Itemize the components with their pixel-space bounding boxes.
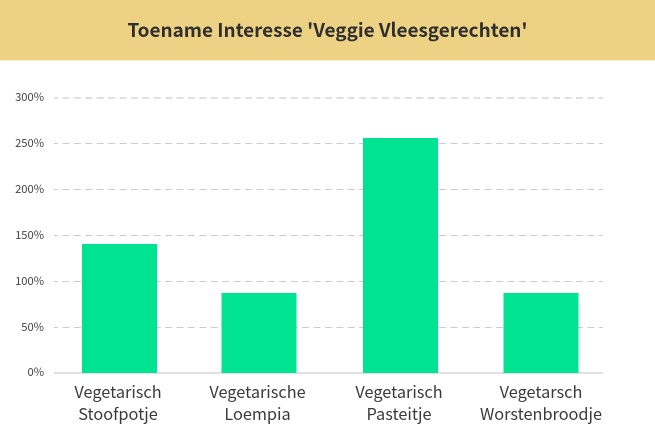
y axis labels [15, 89, 44, 380]
category labels: Pasteitje [367, 401, 431, 425]
category labels: Loempia [224, 401, 291, 425]
category labels: Vegetarische [209, 379, 306, 403]
y axis labels: 50% [21, 319, 44, 335]
y axis labels: 100% [15, 273, 44, 289]
category labels: Vegetarsch [500, 379, 582, 403]
y axis labels: 0% [27, 364, 44, 380]
category labels: Vegetarisch [355, 379, 443, 403]
y axis labels: 150% [15, 227, 44, 243]
title banner [0, 0, 655, 61]
category labels [74, 379, 602, 425]
y axis labels: 200% [15, 181, 44, 197]
y axis labels: 250% [15, 135, 44, 151]
y axis labels: 300% [15, 89, 44, 105]
title: Toename Interesse 'Veggie Vleesgerechten' [127, 16, 528, 43]
bars [82, 138, 578, 373]
category labels: Stoofpotje [78, 401, 158, 425]
category labels: Worstenbroodje [480, 401, 602, 425]
category labels: Vegetarisch [74, 379, 162, 403]
